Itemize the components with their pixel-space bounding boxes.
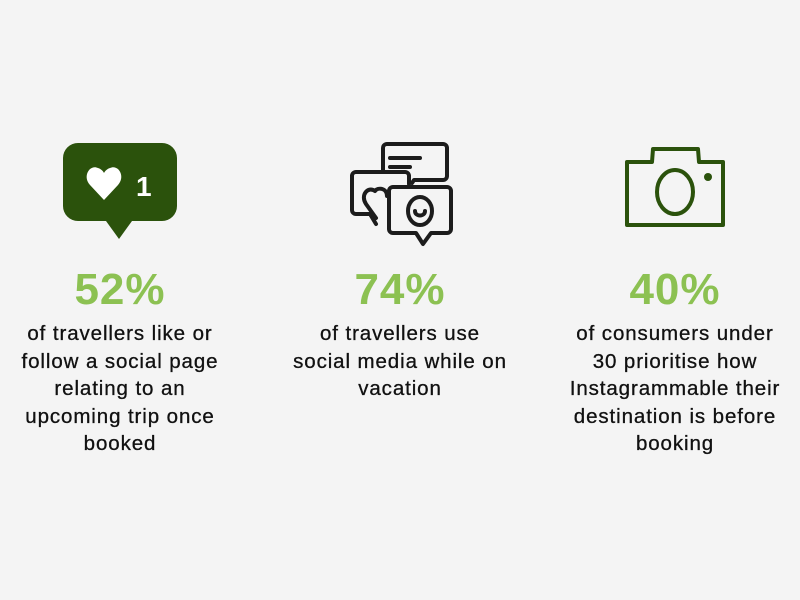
icon: chat bubbles — [350, 142, 453, 246]
stat: 40%: 40% — [629, 265, 721, 314]
stat: 52%: relating to an — [54, 377, 186, 400]
stat: 74%: 74% — [354, 265, 446, 314]
stat: 40%: 30 prioritise how — [593, 350, 757, 372]
stat: 52%: of travellers like or — [27, 322, 213, 345]
stat: 74%: of travellers use — [320, 322, 480, 345]
stat: 74%: vacation — [358, 377, 442, 400]
stat: 52%: booked — [84, 432, 156, 455]
stat: 40%: of consumers under — [576, 322, 774, 345]
stat: 74%: social media while on — [293, 350, 507, 372]
stat: 40% — [570, 265, 780, 455]
stat: 74% — [293, 265, 507, 400]
icon: like notification — [63, 143, 177, 239]
icon: like notification: 1 — [136, 171, 152, 202]
icon: camera — [625, 147, 725, 227]
stat: 52%: upcoming trip once — [25, 404, 215, 428]
stat: 40%: destination is before — [574, 404, 776, 428]
stat: 52%: follow a social page — [22, 350, 218, 372]
stat: 40%: Instagrammable their — [570, 377, 780, 400]
stat: 52% — [22, 265, 218, 455]
stat: 52%: 52% — [74, 265, 166, 314]
stat: 40%: booking — [636, 432, 714, 455]
